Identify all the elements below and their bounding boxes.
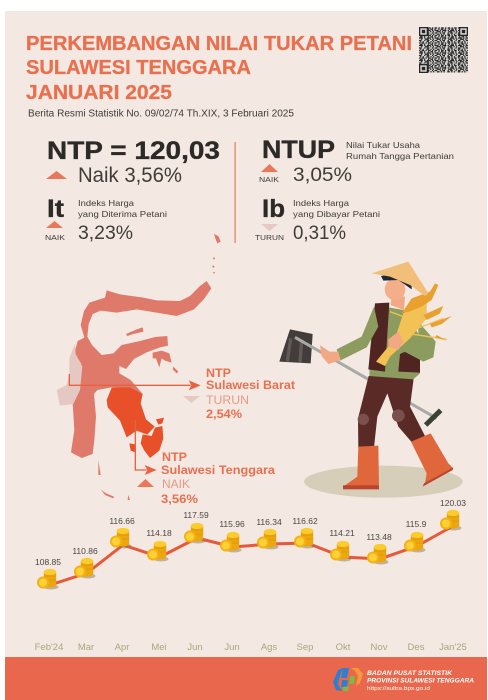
data labels: 117.59 xyxy=(183,510,209,520)
month axis: Des xyxy=(408,642,425,653)
data labels: 114.18 xyxy=(146,528,172,538)
month axis: Okt xyxy=(336,642,351,653)
icon: down triangle xyxy=(183,396,200,403)
stat: NTUP: 3,05% xyxy=(293,165,352,186)
data labels: 114.21 xyxy=(329,528,355,538)
line chart: NTP trend xyxy=(35,498,467,653)
month axis xyxy=(35,642,467,653)
arrow: Sulawesi Barat xyxy=(69,374,191,470)
map: Sulawesi xyxy=(57,234,221,500)
title xyxy=(26,32,412,104)
stat: Ib: TURUN xyxy=(255,235,284,242)
agency name: PROVINSI SULAWESI TENGGARA xyxy=(367,678,474,684)
data labels: 108.85 xyxy=(35,557,61,567)
month axis: Jun xyxy=(224,642,240,653)
month axis: Nov xyxy=(371,642,388,653)
icon: up triangle xyxy=(46,221,63,228)
callout: Sulawesi Tenggara: Sulawesi Tenggara xyxy=(161,465,276,477)
data labels: 116.34 xyxy=(256,517,282,527)
data labels: 113.48 xyxy=(366,532,392,542)
data labels xyxy=(35,498,466,567)
data labels: 110.86 xyxy=(72,546,98,556)
data labels: 116.62 xyxy=(292,516,318,526)
stat: NTUP: Rumah Tangga Pertanian xyxy=(346,151,454,161)
coin markers xyxy=(37,510,462,590)
callout: Sulawesi Barat: TURUN xyxy=(206,395,249,407)
divider xyxy=(234,142,236,243)
arrow: Sulawesi Tenggara xyxy=(145,465,157,475)
shovel xyxy=(279,329,441,425)
stat: NTUP: Nilai Tukar Usaha xyxy=(346,140,420,150)
stat: Ib: Ib xyxy=(262,195,285,223)
callout: Sulawesi Tenggara: NTP xyxy=(162,452,187,464)
stat: NTUP: NAIK xyxy=(259,177,279,184)
stat: It xyxy=(45,195,167,244)
month axis: Feb'24 xyxy=(35,642,63,653)
stat: Ib: Indeks Harga xyxy=(293,198,349,208)
stat: Ib: yang Dibayar Petani xyxy=(293,209,380,219)
title: PERKEMBANGAN NILAI TUKAR PETANI xyxy=(26,32,412,55)
agency name: https://sultra.bps.go.id xyxy=(367,686,430,692)
agency name xyxy=(367,670,474,692)
stat: It: It xyxy=(47,195,65,223)
stat: NTUP xyxy=(259,136,454,186)
callout: Sulawesi Tenggara: NAIK xyxy=(162,479,190,491)
stat: NTUP: NTUP xyxy=(262,136,335,164)
stat: NTP xyxy=(46,137,220,187)
data labels: 116.66 xyxy=(109,516,135,526)
title: SULAWESI TENGGARA xyxy=(26,56,251,79)
region: Sulawesi main island xyxy=(71,281,211,458)
neck and face xyxy=(391,297,405,310)
subtitle: release number: Berita Resmi Statistik No. 09/02/74 Th.XIX, 3 Februari 2025 xyxy=(28,108,295,120)
callout: Sulawesi Barat: Sulawesi Barat xyxy=(206,380,295,392)
month axis: Mei xyxy=(151,642,167,653)
stat: NTP: NTP = 120,03 xyxy=(47,137,220,165)
icon: down triangle xyxy=(261,224,278,231)
icon: up triangle xyxy=(137,479,154,487)
torso xyxy=(369,305,420,379)
arm with hand xyxy=(337,307,378,361)
footer band xyxy=(5,657,487,700)
callout: Sulawesi Barat: 2,54% xyxy=(206,409,242,421)
month axis: Ags xyxy=(261,642,277,653)
stat: It: yang Diterima Petani xyxy=(78,209,167,219)
islands xyxy=(98,234,221,500)
hat xyxy=(372,262,428,296)
boots xyxy=(344,446,379,486)
stat: NTP: Naik 3,56% xyxy=(78,164,182,187)
icon: up triangle xyxy=(46,171,67,179)
month axis: Jun xyxy=(187,642,203,653)
callout: Sulawesi Barat xyxy=(183,368,295,421)
shadow xyxy=(304,466,463,498)
icon: QR code xyxy=(419,27,468,73)
data labels: 115.96 xyxy=(219,519,245,529)
wheat xyxy=(376,283,452,366)
agency name: BADAN PUSAT STATISTIK xyxy=(367,670,452,677)
month axis: Mar xyxy=(78,642,94,653)
icon: up triangle xyxy=(261,164,278,172)
icon: BPS logo xyxy=(333,668,363,691)
arm holding wheat xyxy=(398,322,436,362)
callout: Sulawesi Tenggara: 3,56% xyxy=(161,494,198,506)
region: Sulawesi Barat xyxy=(57,343,82,406)
vest xyxy=(368,303,420,373)
illustration: farmer xyxy=(279,262,463,498)
month axis: Apr xyxy=(115,642,129,653)
stat: It: NAIK xyxy=(45,235,65,242)
month axis: Sep xyxy=(297,642,313,653)
callout: Sulawesi Tenggara xyxy=(137,452,276,506)
callout: Sulawesi Barat: NTP xyxy=(206,368,231,380)
month axis: Jan'25 xyxy=(439,642,467,653)
legs xyxy=(358,376,425,447)
stat: Ib: 0,31% xyxy=(293,223,346,244)
data labels: 120.03 xyxy=(440,498,466,508)
data labels: 115.9 xyxy=(406,519,427,529)
stat: It: Indeks Harga xyxy=(78,198,134,208)
region: Sulawesi Tenggara xyxy=(107,387,164,458)
title: JANUARI 2025 xyxy=(26,81,172,104)
stat: Ib xyxy=(255,195,380,244)
stat: It: 3,23% xyxy=(78,223,133,244)
